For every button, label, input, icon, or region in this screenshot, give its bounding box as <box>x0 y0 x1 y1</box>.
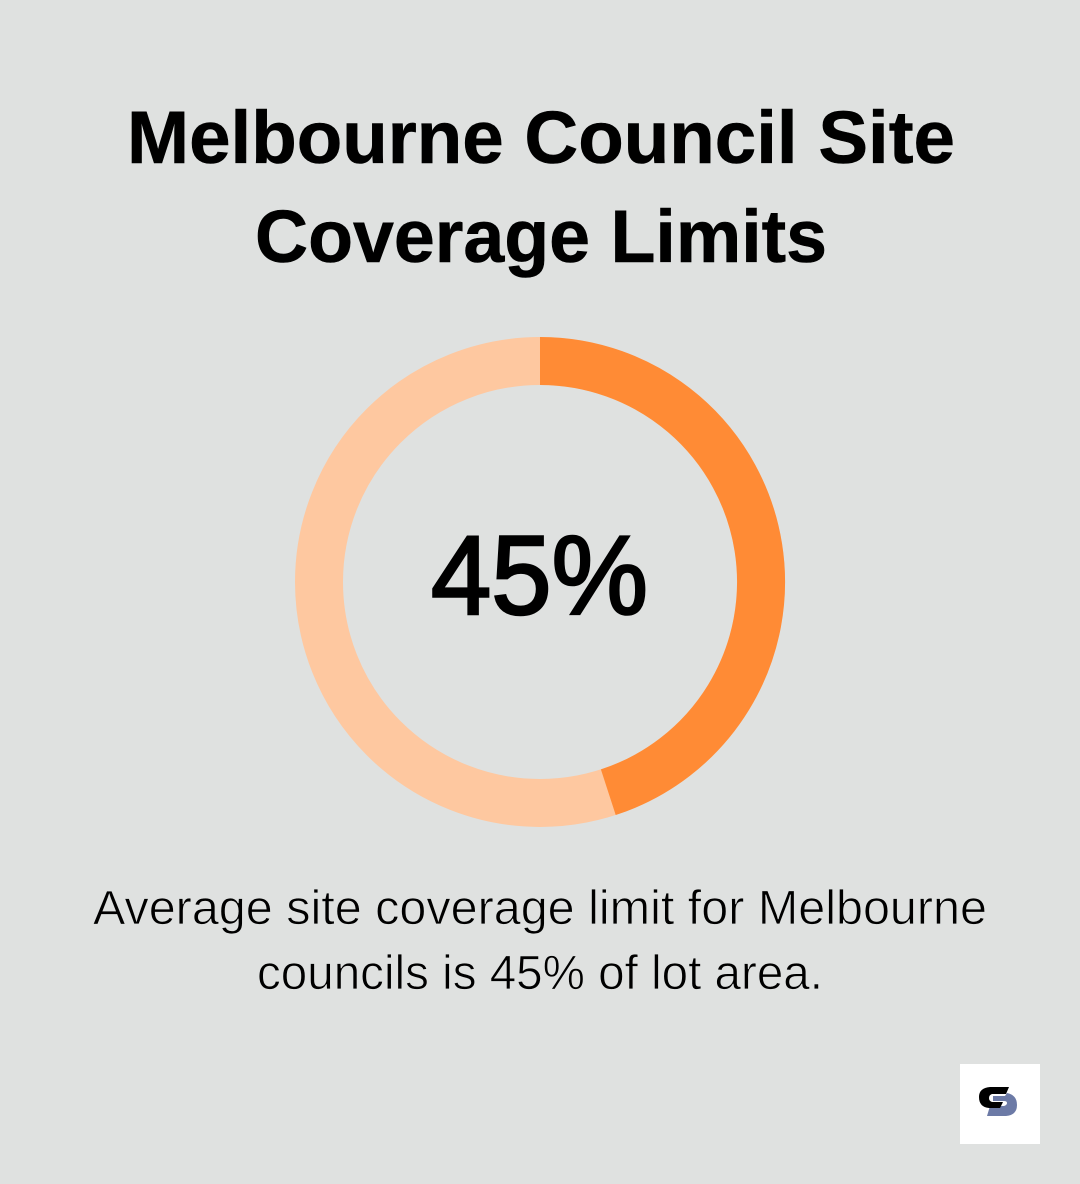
donut value arc <box>540 361 761 792</box>
title: Melbourne Council Site <box>127 96 955 179</box>
description: councils is 45% of lot area. <box>257 947 823 1000</box>
description <box>93 882 987 1000</box>
donut chart: 45% <box>319 361 761 803</box>
title: Coverage Limits <box>255 195 827 278</box>
logo badge <box>960 1064 1040 1144</box>
donut track <box>319 361 761 803</box>
logo mark <box>979 1087 1017 1116</box>
title <box>127 96 955 278</box>
central value: 45% <box>431 513 648 638</box>
description: Average site coverage limit for Melbourne <box>93 882 987 935</box>
